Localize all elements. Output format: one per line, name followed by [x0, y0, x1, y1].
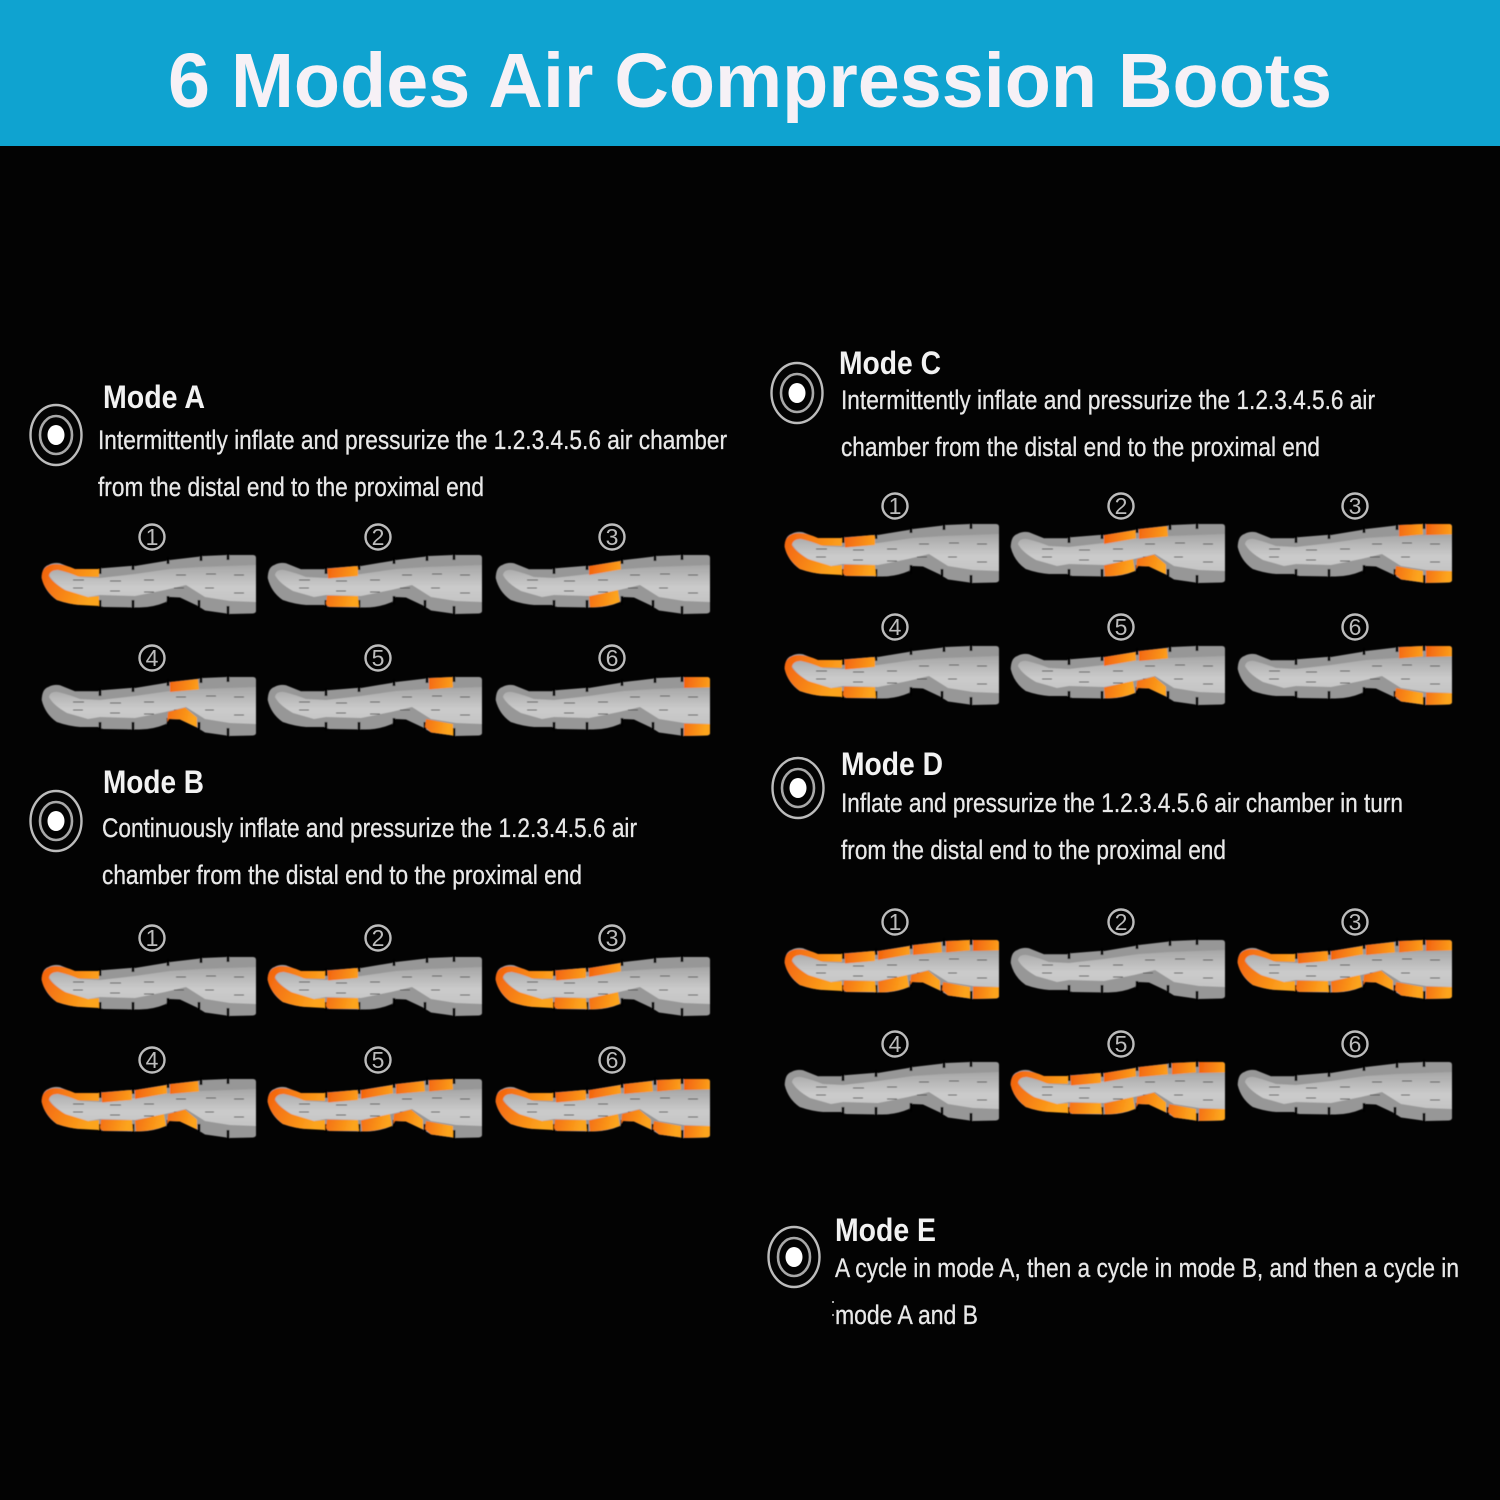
step 6 — [496, 645, 710, 738]
step 1: 1 — [146, 524, 158, 550]
step 1 — [42, 524, 256, 616]
icon: Mode C target — [772, 363, 822, 423]
step 4: 4 — [146, 1047, 159, 1073]
panel: Mode A — [30, 379, 727, 738]
step 3: 3 — [1349, 493, 1361, 519]
step 3 — [1238, 909, 1452, 1001]
step 5 — [268, 1047, 482, 1140]
description: Mode A — [98, 425, 727, 502]
title banner — [0, 0, 1500, 146]
step 2: 2 — [1115, 909, 1127, 935]
description: Mode E: mode A and B — [835, 1300, 978, 1330]
description: Mode C: chamber from the distal end to the proximal end — [841, 432, 1320, 462]
heading: Mode D: Mode D — [841, 746, 943, 782]
panel: Mode C — [772, 345, 1452, 707]
icon: Mode B target — [30, 791, 82, 851]
description: Mode D: Inflate and pressurize the 1.2.3.4.5.6 air chamber in turn — [841, 788, 1403, 818]
description: Mode E — [832, 1253, 1459, 1330]
step 4: 4 — [146, 645, 159, 671]
step 3: 3 — [606, 524, 618, 550]
panel: Mode D — [772, 746, 1452, 1123]
description: Mode A: from the distal end to the proximal end — [98, 472, 484, 502]
step 5: 5 — [1115, 1031, 1127, 1057]
step 1 — [785, 493, 999, 585]
step 6: 6 — [1349, 614, 1361, 640]
step 2 — [1011, 909, 1225, 1001]
step 1: 1 — [889, 909, 901, 935]
step 1 — [785, 909, 999, 1001]
heading: Mode B: Mode B — [103, 764, 204, 800]
step 4 — [42, 1047, 256, 1140]
icon: Mode A target — [30, 405, 82, 465]
description: Mode A: Intermittently inflate and pressurize the 1.2.3.4.5.6 air chamber — [98, 425, 727, 455]
step 6 — [496, 1047, 710, 1140]
step 3 — [1238, 493, 1452, 585]
step 4: 4 — [889, 614, 902, 640]
step 3: 3 — [606, 925, 618, 951]
step 1: 1 — [146, 925, 158, 951]
step 4 — [785, 614, 999, 707]
step 6 — [1238, 614, 1452, 707]
panel: Mode E — [768, 1212, 1459, 1330]
step 3 — [496, 524, 710, 616]
step 5 — [1011, 1031, 1225, 1123]
heading: Mode C: Mode C — [839, 345, 941, 381]
step 1 — [42, 925, 256, 1018]
description: Mode B — [102, 813, 637, 890]
step 5 — [1011, 614, 1225, 707]
step 2 — [268, 925, 482, 1018]
title: 6 Modes Air Compression Boots — [168, 38, 1332, 124]
step 6: 6 — [606, 1047, 618, 1073]
step 5: 5 — [1115, 614, 1127, 640]
icon: Mode D target — [772, 758, 824, 818]
step 2: 2 — [372, 925, 384, 951]
step 2 — [1011, 493, 1225, 585]
step 6: 6 — [606, 645, 618, 671]
step 4 — [785, 1031, 999, 1123]
step 3: 3 — [1349, 909, 1361, 935]
step 6 — [1238, 1031, 1452, 1123]
step 4 — [42, 645, 256, 738]
step 2: 2 — [372, 524, 384, 550]
panel: Mode B — [30, 764, 710, 1140]
step 2 — [268, 524, 482, 616]
description: Mode B: chamber from the distal end to the proximal end — [102, 860, 582, 890]
description: Mode C — [841, 385, 1375, 462]
description: Mode D — [841, 788, 1403, 865]
heading: Mode A: Mode A — [103, 379, 205, 415]
description: Mode D: from the distal end to the proximal end — [841, 835, 1226, 865]
heading: Mode E: Mode E — [835, 1212, 936, 1248]
step 4: 4 — [889, 1031, 902, 1057]
description: Mode C: Intermittently inflate and pressurize the 1.2.3.4.5.6 air — [841, 385, 1375, 415]
step 5 — [268, 645, 482, 738]
step 6: 6 — [1349, 1031, 1361, 1057]
step 1: 1 — [889, 493, 901, 519]
description: Mode B: Continuously inflate and pressurize the 1.2.3.4.5.6 air — [102, 813, 637, 843]
step 5: 5 — [372, 645, 384, 671]
step 2: 2 — [1115, 493, 1127, 519]
step 3 — [496, 925, 710, 1018]
step 5: 5 — [372, 1047, 384, 1073]
icon: Mode E target — [768, 1227, 820, 1287]
